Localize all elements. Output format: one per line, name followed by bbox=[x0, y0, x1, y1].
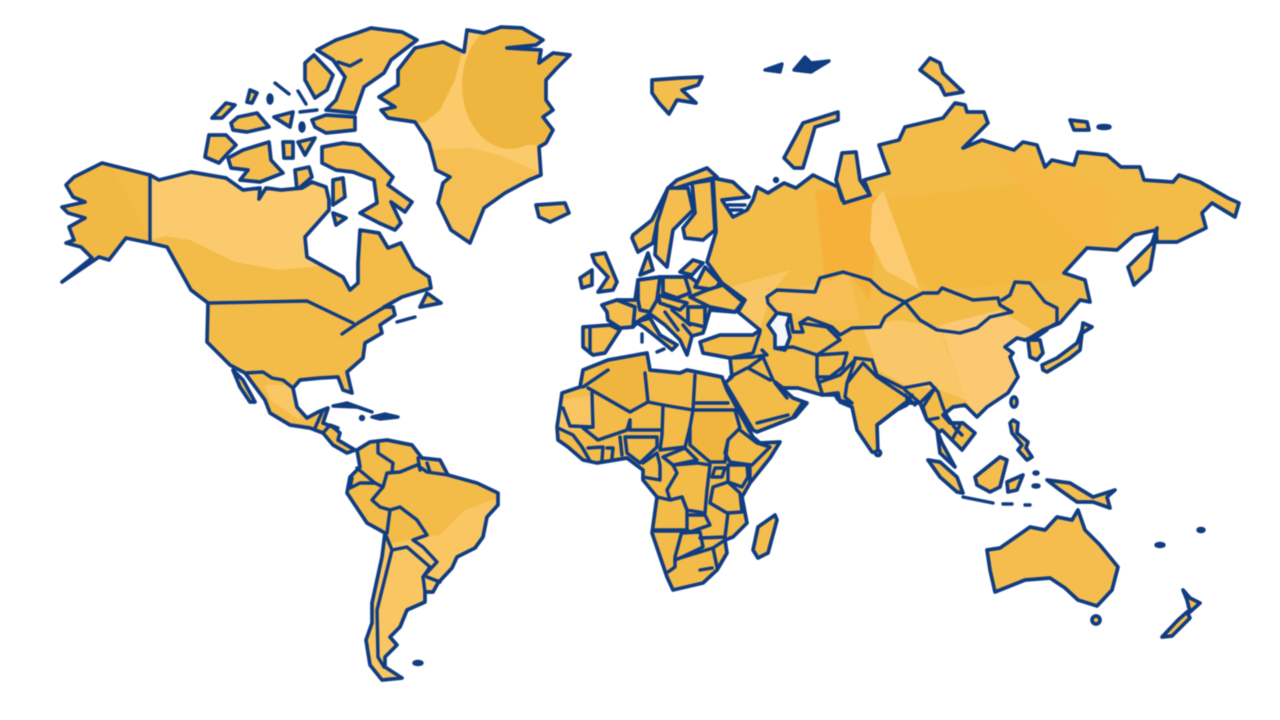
Sakhalin bbox=[1128, 228, 1157, 285]
Sumatra bbox=[928, 460, 963, 493]
Japan bbox=[1042, 323, 1092, 372]
Australia bbox=[987, 510, 1118, 606]
Nova Scotia bbox=[397, 317, 415, 322]
shading: northern Canada light band bbox=[151, 174, 328, 420]
New Guinea bbox=[1047, 480, 1115, 508]
Sweden bbox=[655, 188, 693, 267]
Caspian Sea bbox=[768, 313, 790, 350]
North America bbox=[60, 160, 431, 453]
Alaska and Canada border bbox=[148, 175, 152, 243]
country borders South America bbox=[377, 533, 392, 667]
Europe bbox=[580, 168, 743, 355]
Newfoundland bbox=[420, 293, 441, 307]
Mexico and USA border bbox=[245, 372, 293, 388]
Belarus bbox=[695, 267, 720, 290]
shading: Greenland bbox=[384, 30, 564, 240]
Central Asia borders bbox=[800, 323, 840, 355]
Tasmania bbox=[1092, 616, 1100, 624]
Eurasia bbox=[700, 103, 1239, 467]
country borders Africa bbox=[583, 370, 648, 412]
India and China border bbox=[855, 358, 943, 407]
Spain bbox=[583, 325, 620, 355]
Poland bbox=[663, 277, 690, 298]
shading: South America bbox=[360, 498, 500, 680]
Sardinia bbox=[640, 334, 644, 342]
Russia and China eastern border bbox=[1002, 282, 1057, 327]
Severnaya Zemlya bbox=[920, 58, 963, 95]
Greenland bbox=[376, 24, 573, 246]
Baltic states bbox=[680, 260, 703, 275]
Southeast Asia details bbox=[943, 407, 963, 440]
Balkans bbox=[665, 310, 692, 336]
Sulawesi bbox=[1007, 475, 1023, 492]
Korea bbox=[1025, 330, 1047, 340]
Sicily bbox=[657, 349, 664, 352]
Arctic islands of Canada bbox=[205, 28, 417, 230]
Mongolia border bbox=[905, 288, 1012, 333]
New Siberian Islands bbox=[1070, 120, 1110, 130]
Novaya Zemlya bbox=[784, 112, 838, 168]
New Zealand bbox=[1162, 590, 1200, 637]
shading: Eurasia bbox=[731, 186, 1080, 414]
Borneo bbox=[975, 457, 1007, 492]
Italy bbox=[636, 318, 677, 350]
Ukraine bbox=[690, 285, 743, 312]
Ireland bbox=[580, 270, 592, 288]
Pacific islands bbox=[1156, 528, 1204, 546]
Turkey border bbox=[730, 332, 760, 358]
Sri Lanka bbox=[876, 450, 880, 456]
Finland bbox=[683, 180, 715, 240]
Franz Josef Land bbox=[765, 57, 829, 72]
shading: Africa bbox=[557, 355, 735, 462]
UK bbox=[592, 253, 617, 292]
Yamal peninsula bbox=[774, 152, 870, 203]
Svalbard bbox=[652, 77, 702, 114]
Taiwan bbox=[1011, 397, 1017, 407]
Portugal line bbox=[588, 328, 592, 353]
Iceland bbox=[536, 203, 569, 222]
Philippines bbox=[1010, 420, 1032, 460]
European mainland base bbox=[602, 277, 743, 355]
White Sea inset bbox=[728, 205, 745, 210]
Central America borders bbox=[315, 410, 338, 433]
Bangladesh hatch bbox=[905, 395, 915, 405]
Middle East borders bbox=[730, 350, 770, 380]
France bbox=[602, 300, 635, 328]
South America bbox=[347, 440, 500, 680]
Africa bbox=[557, 353, 780, 590]
Caribbean islands bbox=[333, 403, 398, 420]
Baja California bbox=[233, 370, 255, 402]
Norway bbox=[632, 168, 717, 252]
Kazakhstan border bbox=[767, 272, 905, 335]
Romania bbox=[688, 307, 705, 327]
Falkland Islands bbox=[414, 662, 422, 664]
Canada and USA border bbox=[208, 301, 353, 323]
Germany bbox=[638, 277, 660, 312]
central Europe bbox=[658, 295, 687, 310]
Madagascar bbox=[753, 515, 777, 558]
Java bbox=[963, 497, 1030, 505]
Great Lakes stroke bbox=[342, 302, 393, 334]
small Indonesian islands bbox=[1033, 472, 1039, 487]
Denmark bbox=[640, 253, 653, 275]
